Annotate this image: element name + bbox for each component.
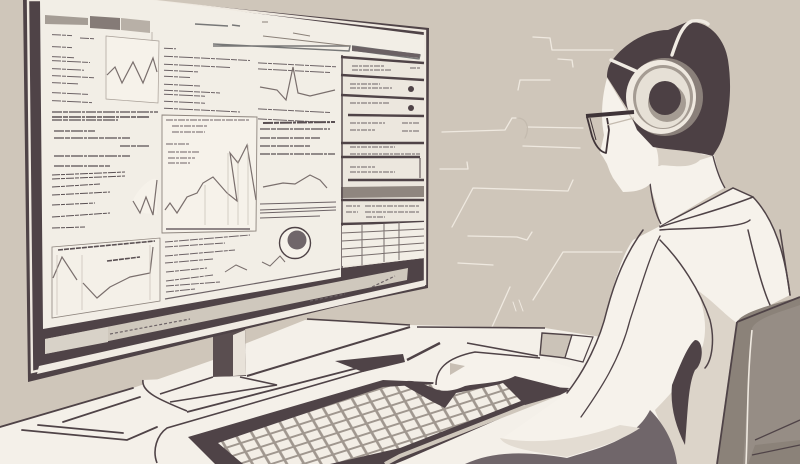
armpit shadow xyxy=(672,340,702,445)
screen side table xyxy=(342,222,424,266)
keyboard xyxy=(188,380,570,464)
chart: screen top left xyxy=(106,36,159,103)
keyboard keys xyxy=(218,380,557,464)
monitor stand xyxy=(143,325,410,411)
monitor xyxy=(23,0,429,382)
desk mat and pen xyxy=(155,343,440,463)
hair xyxy=(607,22,730,156)
chart: screen spike xyxy=(260,67,335,100)
headphone ear cup xyxy=(626,58,703,136)
chart: screen centre large xyxy=(162,115,257,233)
chart: screen left middle xyxy=(52,172,157,228)
chart: screen right lower xyxy=(260,175,336,218)
hand outline xyxy=(436,352,540,385)
monitor bezel highlight xyxy=(28,0,425,372)
shadow below arm xyxy=(465,410,677,464)
arm and shoulder outlines xyxy=(567,188,790,417)
torso shadow xyxy=(655,290,737,464)
office chair xyxy=(717,297,800,464)
screen text, lower centre xyxy=(165,235,340,299)
screen top bar xyxy=(45,15,420,59)
torso and shirt xyxy=(500,188,790,464)
hand shadow on keyboard xyxy=(400,376,570,408)
glasses xyxy=(586,112,634,153)
monitor outer frame xyxy=(23,0,429,382)
sleeve cuff xyxy=(565,335,593,362)
wrist band xyxy=(540,333,572,358)
monitor bottom bezel xyxy=(37,280,425,374)
gauge circle xyxy=(280,228,310,258)
keyboard front rail xyxy=(385,393,560,464)
chart: screen bottom left xyxy=(52,238,160,318)
forearm line xyxy=(467,343,538,356)
desk surface xyxy=(0,320,620,464)
neck xyxy=(645,150,724,226)
background circuit lines xyxy=(440,37,622,327)
screen paper xyxy=(40,0,424,329)
desk back edge lines xyxy=(307,319,545,328)
face xyxy=(600,78,658,192)
screen text, second band xyxy=(52,112,335,166)
screen lower status band xyxy=(45,268,408,354)
screen side panel xyxy=(341,55,424,268)
person xyxy=(400,21,790,464)
screen text columns, top band xyxy=(52,35,336,123)
forearm and hand xyxy=(433,352,572,392)
screen status band controls xyxy=(110,276,395,334)
arm highlight xyxy=(500,425,640,457)
paper on desk xyxy=(0,388,187,440)
keyboard frame xyxy=(188,380,570,464)
neck shadow xyxy=(655,147,713,166)
neck outline xyxy=(650,156,725,224)
headphone band xyxy=(611,21,708,72)
